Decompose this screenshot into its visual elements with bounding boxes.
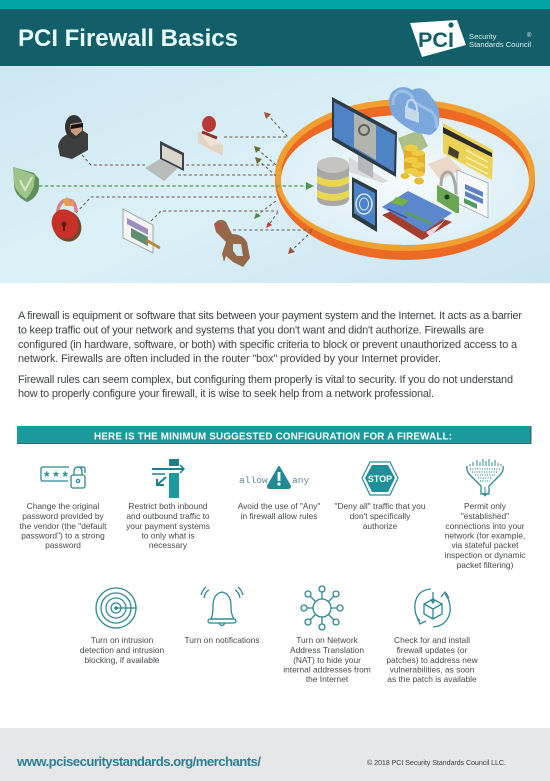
icon: bell [201,587,243,626]
icon: packet filter funnel [467,459,503,496]
item: NAT: the Internet [306,674,349,684]
icon: malware envelope [198,116,223,156]
PCI logo [410,20,532,57]
item: deny all: don't specifically [350,511,411,521]
firewall ring back [275,99,535,260]
item: established connections: "established" [461,511,509,521]
item: restrict traffic: necessary [149,540,188,550]
item: NAT: internal addresses from [283,664,371,674]
icon: green padlock [437,172,459,213]
second paragraph: Firewall rules can seem complex, but configuring them properly is vital to security. If you do not understand [18,374,513,386]
intro paragraph: network. Firewalls are often included in the router "box" provided by your Internet provider. [18,353,441,365]
item: avoid any: Avoid the use of "Any" [238,501,320,511]
PCI logo: Security [469,32,497,41]
item: intrusion detection: Turn on intrusion [91,635,154,645]
item: restrict traffic [126,459,210,550]
icon: coins and cash [398,130,428,184]
footer [0,728,550,781]
item: established connections: connections into your [445,521,525,531]
item: avoid any: in firewall allow rules [241,511,317,521]
item: established connections: inspection or dynamic [444,550,526,560]
item: firewall updates: Check for and install [394,635,470,645]
icon: login form [457,170,488,218]
intro paragraph: configured (in hardware, software, or both) with specific criteria to block or prevent unauthorized access to a [18,339,518,351]
item: NAT: Address Translation [290,645,364,655]
item: intrusion detection: detection and intrusion [80,645,164,655]
icon: monitor [332,97,397,183]
icon: password field: *** [44,468,69,484]
item: restrict traffic: your payment systems [126,521,210,531]
icon: credit cards [382,191,452,240]
icon: trojan horse [214,220,250,267]
item: default password: the vendor (the "default [20,521,107,531]
item: established connections: Permit only [464,501,507,511]
item: deny all: "Deny all" traffic that you [335,501,426,511]
second paragraph [18,374,513,400]
item: deny all [335,462,426,531]
item: firewall updates: patches) to address new [386,655,479,665]
icon: allow warning any [239,467,310,488]
PCI logo: Standards Council [469,40,531,49]
icon: laptop [145,141,184,181]
icon: database [317,157,349,206]
intro paragraph: to keep traffic out of your network and systems that you don't want and didn't authorize. Firewalls are [18,324,484,336]
item: avoid any [238,467,320,521]
item: established connections [444,459,526,570]
icon: inbound and outbound arrows through wall [152,459,184,498]
icon: radar [96,588,137,628]
icon: update box with circular arrows [415,589,450,627]
icon: cloud with lock [389,87,439,135]
intro paragraph: A firewall is equipment or software that sits between your payment system and the Internet. It acts as a barrier [18,310,522,322]
icon: allow warning any: any [292,475,310,486]
icon: broken red padlock [47,197,86,246]
website link: www.pcisecuritystandards.org/merchants/ [16,754,261,769]
item: default password: password [45,540,81,550]
item: firewall updates: as the patch is available [387,674,477,684]
icon: green shield [13,167,39,202]
icon: yellow ID card [443,123,493,180]
copyright: © 2018 PCI Security Standards Council LLC. [367,758,506,767]
item: NAT: Turn on Network [296,635,359,645]
intro paragraph [18,310,522,365]
item: restrict traffic: and outbound traffic to [126,511,210,521]
title: PCI Firewall Basics [18,25,238,52]
PCI logo: ® [527,32,532,39]
icon: stop sign: STOP [368,474,392,484]
section banner [17,426,532,444]
icon: envelope [428,156,462,180]
second paragraph: how to properly configure your firewall, it is wise to seek help from a network professional. [18,388,434,400]
item: firewall updates: firewall updates (or [397,645,468,655]
header band [0,0,550,66]
icon: network nodes [301,586,343,630]
item: firewall updates [386,589,479,684]
item: notifications: Turn on notifications [184,635,260,645]
icon: hacker [58,115,88,159]
item: restrict traffic: to only what is [141,530,195,540]
item: intrusion detection [80,588,164,665]
item: default password [20,467,107,550]
item: default password: password provided by [22,511,105,521]
item: default password: Change the original [27,501,99,511]
item: notifications [184,587,260,645]
item: deny all: authorize [363,521,398,531]
item: firewall updates: vulnerabilities, as soon [390,664,475,674]
PCI logo: PCI [418,29,454,52]
item: NAT [283,586,371,684]
item: established connections: via stateful packet [451,540,519,550]
icon: phone [352,177,377,232]
item: restrict traffic: Restrict both inbound [128,501,208,511]
threat connection lines [39,112,314,254]
section banner: HERE IS THE MINIMUM SUGGESTED CONFIGURATION FOR A FIREWALL: [94,432,452,442]
icon: browser with malicious code [123,209,160,253]
icon: allow warning any: allow [239,475,268,486]
item: default password: password") to a strong [21,530,105,540]
item: established connections: network (for example, [445,530,525,540]
item: established connections: packet filtering) [457,560,514,570]
item: NAT: (NAT) to hide your [293,655,361,665]
hero illustration [0,66,550,283]
item: intrusion detection: blocking, if available [85,655,160,665]
